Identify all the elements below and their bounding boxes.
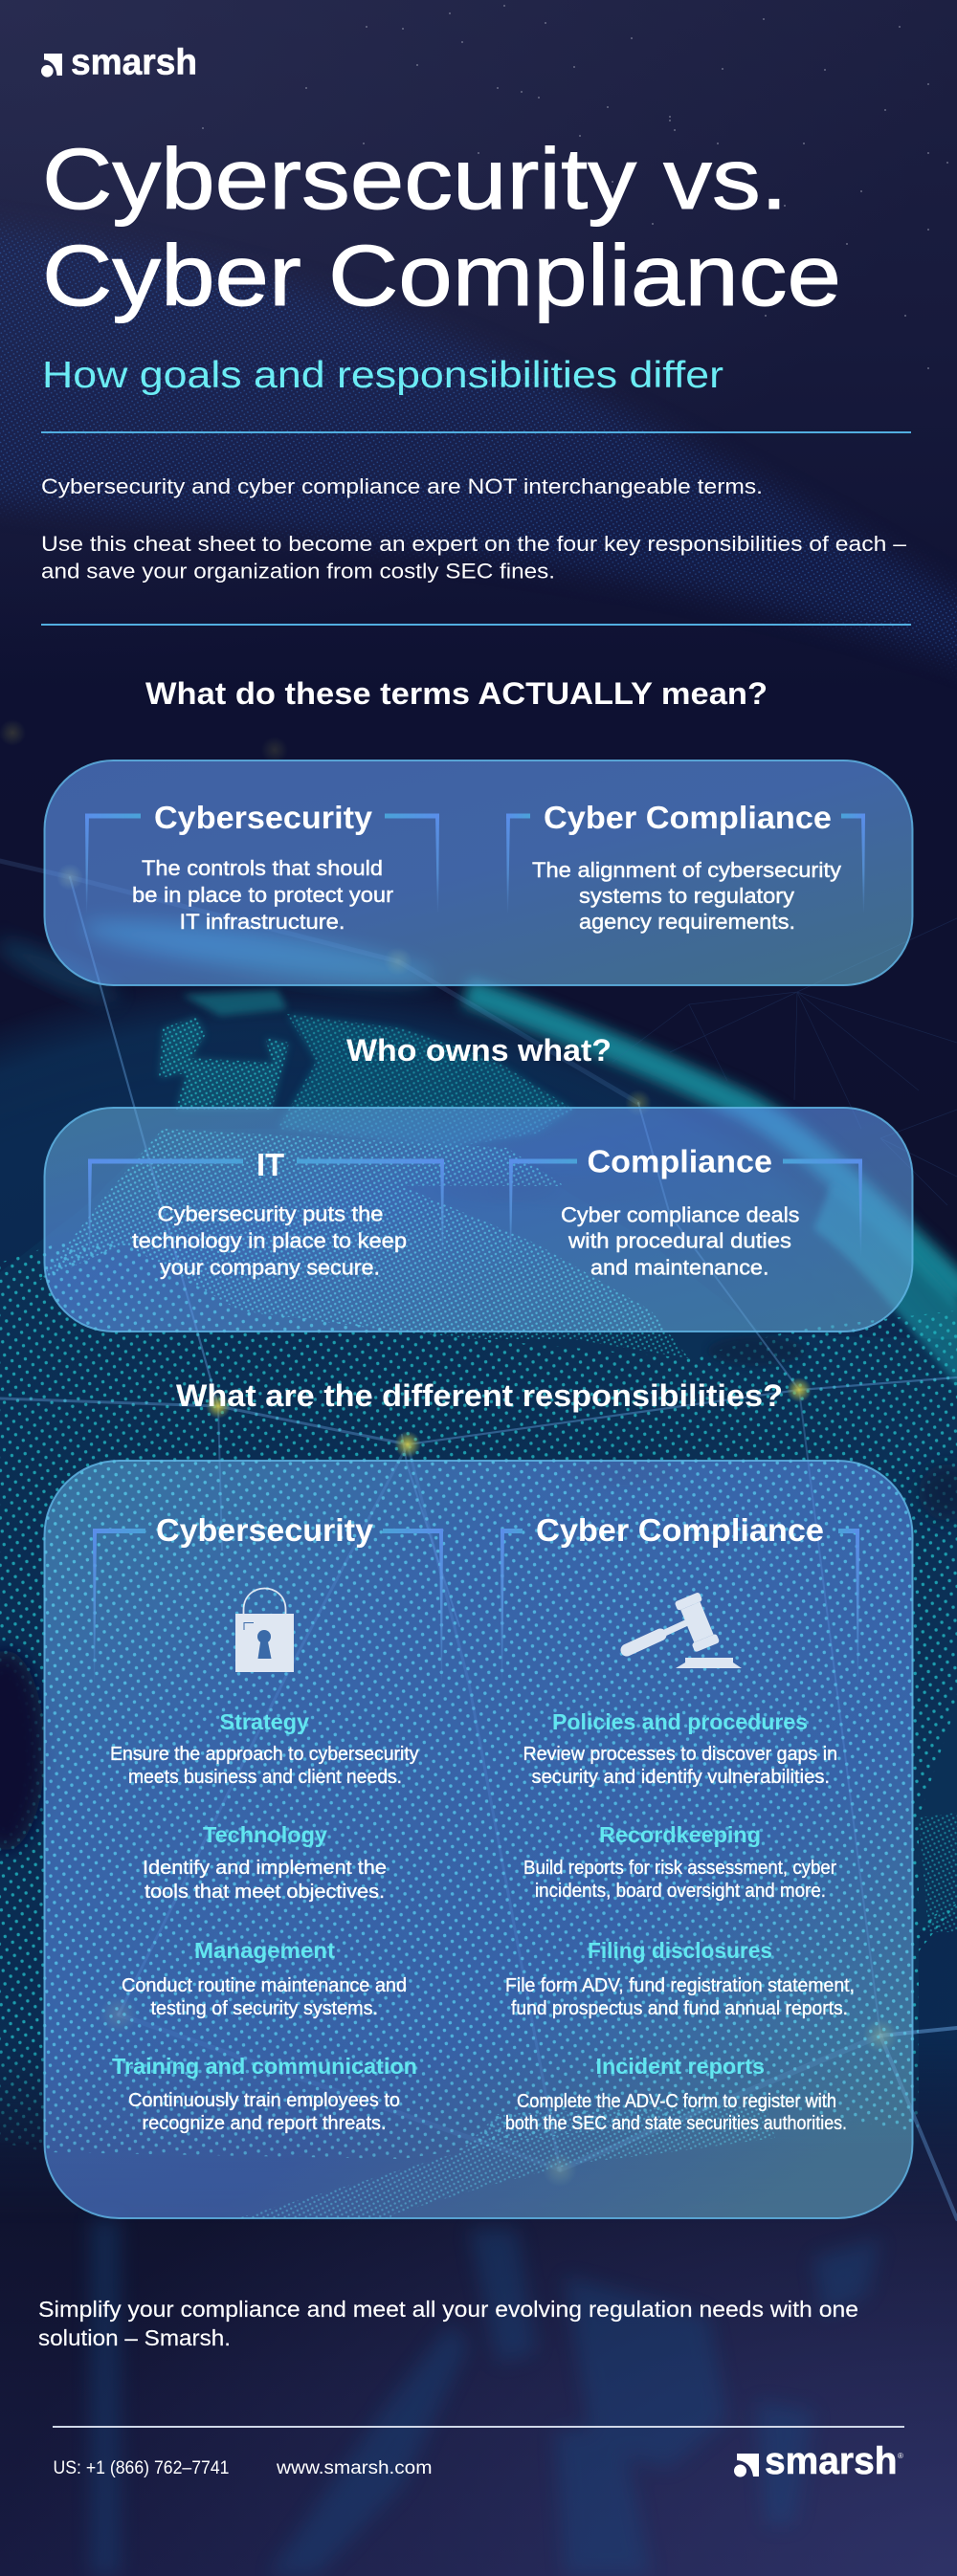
responsibility: filing disclosures: [505, 1938, 855, 2019]
column heading: cybersecurity: Cybersecurity: [156, 1512, 374, 1548]
definition: cyber compliance: systems to regulatory: [579, 884, 794, 908]
responsibility: recordkeeping: Build reports for risk assessment, cyber: [523, 1858, 836, 1879]
background: dotted wave: [0, 214, 957, 674]
divider: [41, 624, 911, 626]
background: faint star lines: [612, 918, 957, 1205]
ownership: compliance: Cyber compliance deals: [561, 1203, 800, 1226]
definition: cyber compliance: agency requirements.: [579, 910, 795, 934]
bracket: cyber compliance definition: [506, 813, 865, 914]
panel: ownership: [44, 1107, 913, 1332]
responsibility: technology: tools that meet objectives.: [145, 1882, 385, 1903]
responsibility: recordkeeping: incidents, board oversight and more.: [535, 1881, 826, 1902]
definition: cyber compliance: The alignment of cybersecurity: [532, 858, 841, 882]
ownership: IT: [132, 1147, 407, 1280]
responsibility: incident reports: Complete the ADV-C form to register with: [517, 2091, 836, 2112]
responsibility: policies and procedures: Review processes to discover gaps in: [523, 1744, 837, 1765]
column heading: cyber compliance: Cyber Compliance: [536, 1512, 824, 1548]
ownership: IT: technology in place to keep: [132, 1228, 407, 1253]
ownership: IT: your company secure.: [160, 1255, 380, 1280]
background: faint world map below: [91, 2219, 880, 2576]
ownership: IT: IT: [256, 1147, 284, 1182]
bracket: cybersecurity definition: [85, 813, 439, 914]
closing statement: [38, 2297, 858, 2350]
bracket: cybersecurity column: [93, 1529, 443, 1684]
footer contact: [54, 2458, 433, 2478]
responsibility: strategy: meets business and client needs.: [128, 1767, 402, 1788]
responsibility: strategy: [110, 1709, 419, 1788]
heading: what do these terms mean: What do these terms ACTUALLY mean?: [145, 676, 768, 711]
ownership: compliance: and maintenance.: [590, 1255, 769, 1280]
intro text: Cybersecurity and cyber compliance are NOT interchangeable terms.: [41, 474, 763, 498]
background: network lines: [0, 861, 957, 2219]
closing statement: Simplify your compliance and meet all your evolving regulation needs with one: [38, 2297, 858, 2322]
ownership: compliance: [561, 1144, 800, 1280]
footer divider: [53, 2426, 904, 2428]
footer contact: US: +1 (866) 762–7741: [54, 2458, 230, 2478]
responsibility: training and communication: Training and communication: [112, 2054, 417, 2079]
logo: smarsh top: smarsh: [71, 43, 197, 83]
definition: cybersecurity: The controls that should: [142, 856, 383, 880]
responsibility: incident reports: both the SEC and state securities authorities.: [505, 2113, 847, 2134]
divider: [41, 431, 911, 433]
responsibility: management: [122, 1938, 407, 2019]
responsibility: management: Conduct routine maintenance and: [122, 1975, 407, 1996]
responsibility: training and communication: recognize and report threats.: [142, 2113, 387, 2134]
closing statement: solution – Smarsh.: [38, 2325, 231, 2350]
responsibility: training and communication: [112, 2054, 417, 2134]
responsibility: technology: Technology: [203, 1822, 327, 1847]
responsibility: strategy: Strategy: [220, 1709, 309, 1734]
panel: definitions: [44, 760, 913, 985]
responsibility: filing disclosures: Filing disclosures: [588, 1938, 772, 1963]
icon: gavel: [627, 1592, 742, 1668]
responsibility: management: testing of security systems.: [151, 1998, 378, 2019]
intro text: Use this cheat sheet to become an expert on the four key responsibilities of each –: [41, 532, 907, 556]
footer contact: www.smarsh.com: [276, 2458, 433, 2478]
responsibility: management: Management: [194, 1938, 335, 1963]
responsibility: technology: Identify and implement the: [143, 1858, 387, 1879]
responsibility: recordkeeping: [523, 1822, 836, 1902]
subtitle: How goals and responsibilities differ: [42, 355, 723, 396]
responsibility: strategy: Ensure the approach to cybersecurity: [110, 1744, 419, 1765]
definition: cybersecurity: Cybersecurity: [154, 800, 373, 835]
intro text: and save your organization from costly SEC fines.: [41, 559, 555, 583]
responsibility: policies and procedures: Policies and procedures: [552, 1709, 808, 1734]
responsibility: incident reports: Incident reports: [595, 2054, 765, 2079]
logo: smarsh bottom: smarsh: [765, 2440, 898, 2482]
responsibility: incident reports: [505, 2054, 847, 2134]
ownership: compliance: with procedural duties: [568, 1228, 791, 1253]
title: Cyber Compliance: [42, 229, 841, 324]
responsibility: filing disclosures: fund prospectus and fund annual reports.: [511, 1998, 848, 2019]
background: network nodes: [0, 719, 898, 2187]
intro text: [41, 474, 907, 583]
definition: cybersecurity: IT infrastructure.: [180, 910, 345, 934]
icon: padlock: [235, 1588, 294, 1672]
bracket: IT: [88, 1159, 444, 1257]
bracket: cyber compliance column: [501, 1529, 859, 1684]
heading: different responsibilities: What are the different responsibilities?: [176, 1378, 783, 1413]
bracket: compliance: [509, 1159, 862, 1257]
definition: cyber compliance: Cyber Compliance: [544, 800, 832, 835]
panel: responsibilities: [44, 1460, 913, 2219]
title: [42, 132, 841, 324]
responsibility: training and communication: Continuously train employees to: [128, 2090, 400, 2111]
definition: cybersecurity: [132, 800, 393, 934]
responsibility: policies and procedures: [523, 1709, 837, 1788]
background: stars: [202, 5, 948, 369]
responsibility: recordkeeping: Recordkeeping: [599, 1822, 761, 1847]
ownership: compliance: Compliance: [588, 1144, 772, 1178]
responsibility: technology: [143, 1822, 387, 1903]
background: globe with dotted continents: [0, 914, 957, 2157]
definition: cyber compliance: [532, 800, 841, 934]
responsibility: filing disclosures: File form ADV, fund registration statement,: [505, 1975, 855, 1996]
logo: smarsh bottom: ®: [898, 2452, 903, 2460]
title: Cybersecurity vs.: [42, 132, 788, 228]
background: continent dots: [0, 1014, 957, 2259]
responsibility: policies and procedures: security and identify vulnerabilities.: [532, 1767, 830, 1788]
ownership: IT: Cybersecurity puts the: [157, 1201, 383, 1226]
heading: who owns what: Who owns what?: [346, 1033, 612, 1068]
definition: cybersecurity: be in place to protect your: [132, 883, 393, 907]
